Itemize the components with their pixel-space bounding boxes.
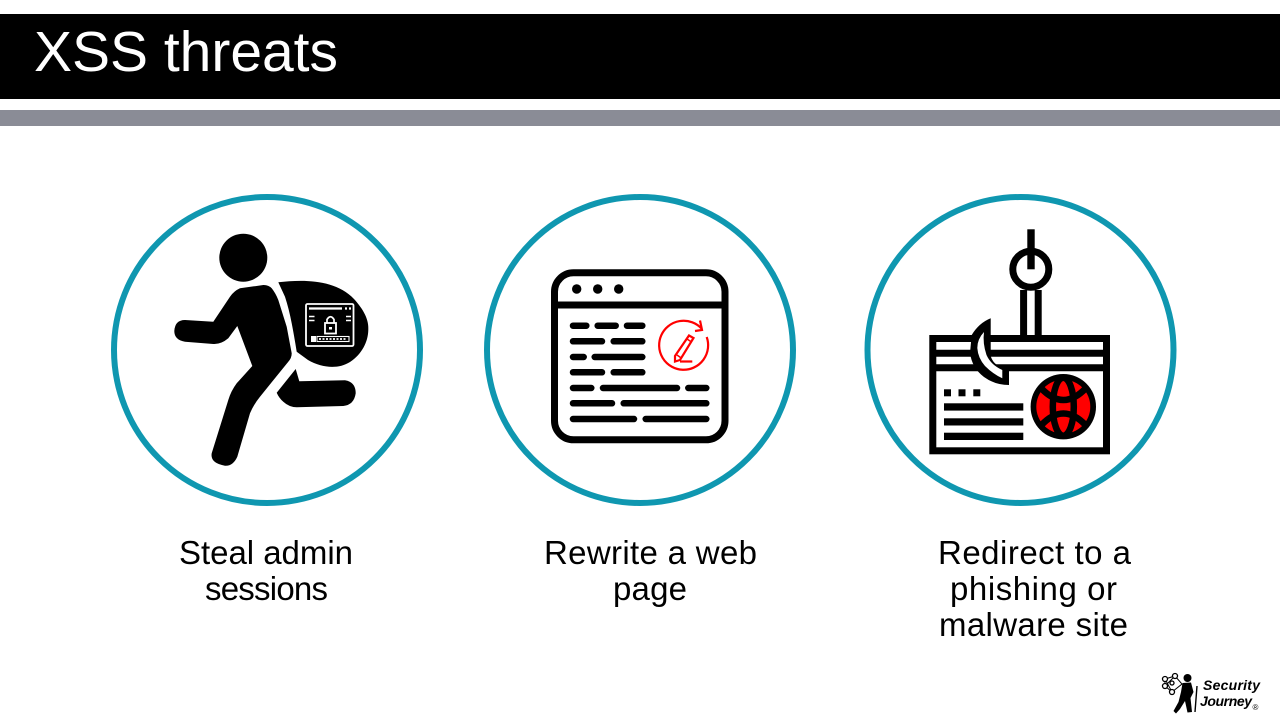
icon: hiker with network xyxy=(1162,674,1197,714)
logo: Security Journey xyxy=(1162,674,1261,714)
bag xyxy=(278,281,368,367)
panel: rewrite a web page xyxy=(487,197,793,607)
icon: red globe xyxy=(1031,374,1096,439)
panel: steal admin sessions xyxy=(114,197,420,607)
hook line and eye xyxy=(1013,251,1049,336)
label: sessions xyxy=(205,570,328,607)
ring xyxy=(114,197,420,503)
back leg xyxy=(277,369,356,407)
label xyxy=(179,534,353,607)
browser frame xyxy=(554,273,725,440)
page lines xyxy=(944,403,1023,440)
panel: redirect to phishing site xyxy=(868,197,1174,643)
title: XSS threats xyxy=(34,20,338,84)
label: phishing or xyxy=(950,570,1117,607)
label: malware site xyxy=(939,606,1128,643)
label: page xyxy=(613,570,687,607)
label: Steal admin xyxy=(179,534,353,571)
head xyxy=(219,234,267,282)
wordmark: ® xyxy=(1252,703,1258,712)
wordmark: Security xyxy=(1203,677,1261,693)
hook barb xyxy=(970,318,1009,385)
body xyxy=(174,285,292,466)
label: Redirect to a xyxy=(938,534,1132,571)
wordmark xyxy=(1200,677,1261,712)
icon: running thief with bag xyxy=(174,234,368,466)
ring xyxy=(487,197,793,503)
ring xyxy=(868,197,1174,503)
wordmark: Journey xyxy=(1200,693,1253,709)
label xyxy=(544,534,757,607)
label: Rewrite a web xyxy=(544,534,757,571)
label xyxy=(938,534,1132,643)
icon: fishing hook on web page xyxy=(933,229,1106,451)
text lines xyxy=(573,326,706,419)
window dots xyxy=(572,284,623,294)
title banner xyxy=(0,14,1280,99)
icon: browser window with edit pen xyxy=(554,273,725,440)
page frame xyxy=(933,338,1106,451)
page dots xyxy=(944,389,980,396)
grey divider bar xyxy=(0,110,1280,126)
icon: red refresh pen xyxy=(659,320,708,370)
icon: locked login window xyxy=(306,304,354,346)
